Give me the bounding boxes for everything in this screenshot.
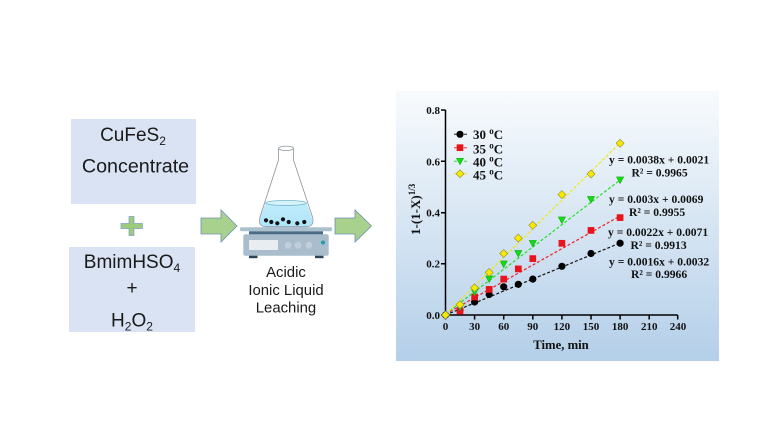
- equations: trend line fits: [608, 154, 709, 281]
- legend: C: [494, 141, 503, 156]
- panel: BmimHSO4 and H2O2: +: [126, 278, 138, 299]
- panel: BmimHSO4 and H2O2: BmimHSO: [84, 252, 174, 273]
- panel: BmimHSO4 and H2O2: H: [111, 310, 125, 332]
- y axis title: 1/3: [407, 183, 417, 195]
- series: 30 °C: [442, 240, 624, 319]
- arrow: into leaching: [201, 210, 237, 242]
- legend: 45: [473, 167, 486, 182]
- x axis tick labels: 120: [554, 321, 571, 333]
- equations: trend line fits: y = 0.0038x + 0.0021: [609, 154, 709, 167]
- x axis tick labels: 60: [498, 321, 510, 333]
- legend: 30: [473, 127, 486, 142]
- panel: BmimHSO4 and H2O2: 4: [174, 261, 181, 275]
- icon: hot plate: [240, 227, 332, 258]
- legend: o: [489, 166, 494, 176]
- equations: trend line fits: y = 0.0022x + 0.0071: [608, 226, 708, 239]
- y axis tick labels: [426, 105, 440, 322]
- icon: ore particles: [264, 217, 306, 225]
- x axis tick labels: 150: [583, 321, 600, 333]
- panel: kinetics chart: [396, 91, 719, 361]
- series: 35 °C: [446, 215, 623, 314]
- x axis tick labels: 210: [641, 321, 658, 333]
- series: 40 °C: [446, 177, 624, 314]
- y axis tick labels: 0.4: [426, 208, 440, 220]
- panel: CuFeS2 concentrate: CuFeS: [100, 125, 159, 146]
- panel: CuFeS2 concentrate: Concentrate: [82, 156, 189, 178]
- icon: flask on stirrer hot plate: [240, 146, 332, 258]
- legend: C: [494, 127, 503, 142]
- equations: trend line fits: R² = 0.9966: [631, 268, 687, 281]
- chart axes: [441, 110, 678, 320]
- equations: trend line fits: R² = 0.9955: [629, 206, 685, 219]
- legend: 35: [473, 141, 486, 156]
- icon: green plus: [121, 216, 142, 236]
- legend: o: [489, 126, 494, 136]
- y axis tick labels: 0.0: [426, 310, 440, 322]
- y axis title: 1-(1-X): [408, 195, 423, 235]
- y axis tick labels: 0.8: [426, 105, 440, 117]
- x axis tick labels: 30: [469, 321, 481, 333]
- legend: [454, 126, 503, 182]
- panel: BmimHSO4 and H2O2: [69, 247, 195, 334]
- panel: BmimHSO4 and H2O2: 2: [125, 320, 132, 334]
- icon: liquid in flask: [260, 202, 312, 226]
- panel: CuFeS2 concentrate: [71, 119, 196, 204]
- label: acidic ionic liquid leaching: Acidic: [266, 265, 306, 281]
- y axis tick labels: 0.2: [426, 259, 440, 271]
- x axis tick labels: 90: [527, 321, 539, 333]
- x axis title: Time, min: [533, 338, 589, 352]
- legend: C: [494, 167, 503, 182]
- panel: BmimHSO4 and H2O2: 2: [146, 320, 153, 334]
- label: acidic ionic liquid leaching: Ionic Liquid: [248, 283, 324, 299]
- panel: BmimHSO4 and H2O2: O: [131, 310, 146, 332]
- label: acidic ionic liquid leaching: [248, 265, 324, 316]
- label: acidic ionic liquid leaching: Leaching: [256, 300, 316, 316]
- x axis tick labels: [443, 321, 687, 333]
- equations: trend line fits: R² = 0.9913: [630, 239, 687, 252]
- panel: CuFeS2 concentrate: 2: [159, 134, 166, 148]
- legend: C: [494, 155, 503, 170]
- x axis tick labels: 240: [670, 321, 687, 333]
- equations: trend line fits: R² = 0.9965: [632, 166, 688, 179]
- legend: 40: [473, 155, 486, 170]
- legend: o: [489, 140, 494, 150]
- equations: trend line fits: y = 0.0016x + 0.0032: [609, 256, 709, 269]
- series: 45 °C: [442, 139, 624, 319]
- x axis tick labels: 0: [443, 321, 449, 333]
- y axis tick labels: 0.6: [426, 156, 440, 168]
- icon: flask outline: [259, 146, 313, 227]
- arrow: to kinetics chart: [335, 210, 372, 242]
- x axis tick labels: 180: [612, 321, 629, 333]
- equations: trend line fits: y = 0.003x + 0.0069: [609, 193, 704, 206]
- legend: o: [489, 154, 494, 164]
